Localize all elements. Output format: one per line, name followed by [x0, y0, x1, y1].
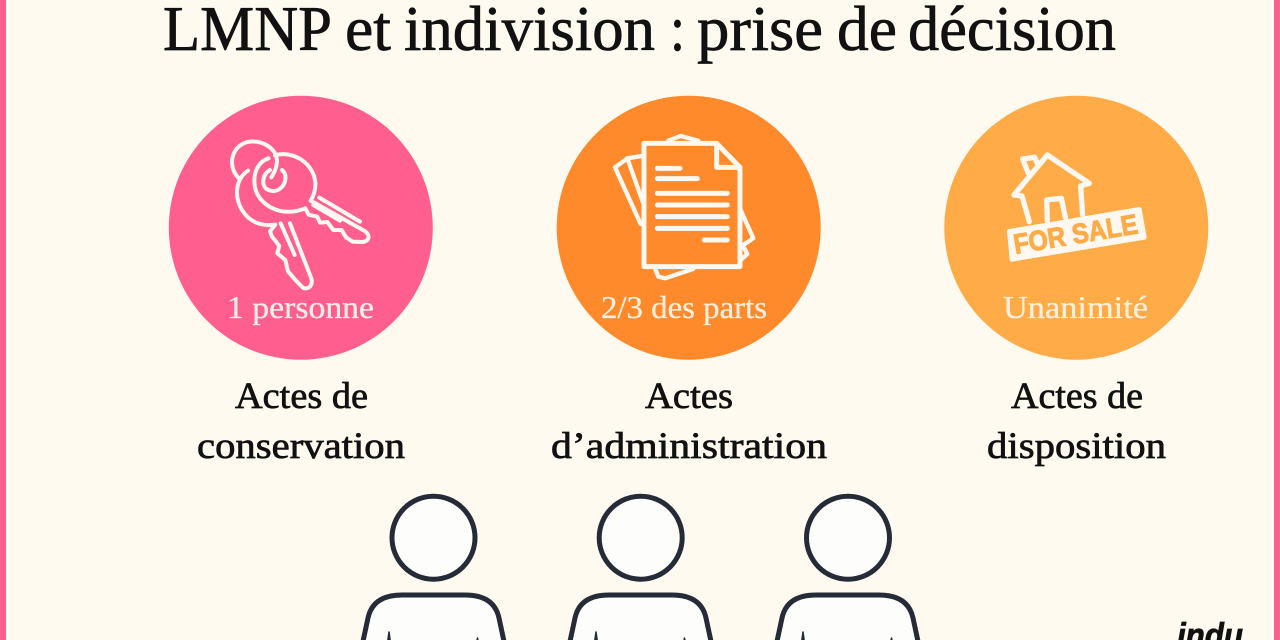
pink circle [169, 96, 433, 360]
light orange circle [944, 96, 1208, 360]
panel: conservation [169, 96, 433, 467]
icon: documents [615, 136, 753, 278]
label: actes de disposition: Actes de [1011, 376, 1143, 417]
person 2 [569, 496, 712, 640]
title [163, 0, 1116, 64]
value: unanimité: Unanimité [1003, 289, 1148, 325]
icon: keys [232, 142, 369, 288]
icon: house for sale: FOR SALE [1011, 208, 1140, 260]
label: actes d'administration: Actes [645, 376, 733, 417]
icon: house for sale [1009, 155, 1144, 260]
label: actes de disposition [987, 376, 1166, 467]
value: 2/3 des parts: 2/3 des parts [601, 289, 767, 325]
panel: administration [551, 96, 827, 467]
person 1 [362, 496, 505, 640]
panel: disposition [944, 96, 1208, 467]
person 3 [776, 496, 919, 640]
label: actes de conservation [197, 376, 405, 467]
label: actes de conservation: conservation [197, 426, 405, 467]
label: actes de disposition: disposition [987, 426, 1166, 467]
label: actes de conservation: Actes de [235, 376, 368, 417]
label: actes d'administration: d’administration [551, 426, 827, 467]
value: 1 personne: 1 personne [227, 289, 374, 325]
label: actes d'administration [551, 376, 827, 467]
orange circle [557, 96, 821, 360]
